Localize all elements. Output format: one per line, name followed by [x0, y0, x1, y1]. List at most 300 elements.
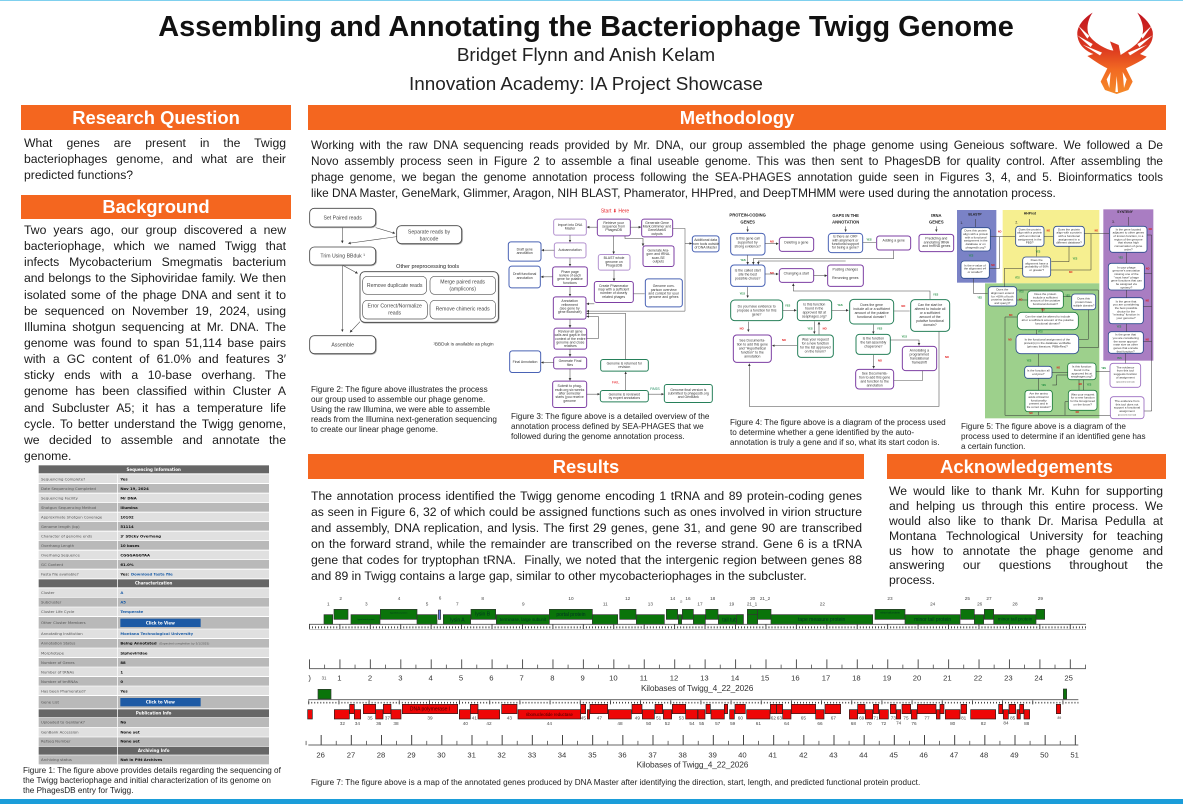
flowchart: figure 5 function decisions: YES — [1117, 327, 1122, 329]
flowchart: figure 5 function decisions: proteins (subject — [991, 298, 1014, 302]
flowchart: figure 5 function decisions: NO — [1019, 300, 1023, 302]
flowchart: figure 4 gene decisions: and "Hypothetical — [739, 346, 766, 350]
flowchart: figure 3 annotation overview: Retrieve your — [603, 221, 625, 225]
gene numbers: reverse track: 60 — [738, 715, 743, 720]
flowchart: figure 3 annotation overview: map with a sufficient — [598, 288, 629, 292]
scale: kilobases 26 to 51: 50 — [1040, 750, 1049, 759]
table: figure 1 phage data: Gene List — [41, 700, 60, 705]
gene track: reverse genes 32 to 89: DNA polymerase I — [410, 707, 450, 713]
flowchart: figure 3 annotation overview: genome — [563, 399, 576, 403]
flowchart: figure 5 function decisions: for >60% of both — [991, 294, 1014, 298]
text: background: with a GC content of 61.0% and features 3′ — [24, 352, 286, 366]
table: figure 1 phage data: GenBank Accession — [41, 729, 79, 734]
scale: kilobases 26 to 51: 41 — [768, 750, 777, 759]
table: figure 1 phage data: Shotgun Sequencing Method — [41, 505, 97, 510]
flowchart: figure 5 function decisions: Can the start be altered to include — [1025, 315, 1071, 319]
flowchart: figure 5 function decisions: YES — [1015, 277, 1020, 279]
flowchart: figure 4 gene decisions: translational — [910, 357, 929, 361]
flowchart: figure 3 annotation overview: Master — [565, 226, 576, 230]
flowchart: figure 4 gene decisions: Does the gene — [860, 303, 883, 307]
flowchart: figure 4 gene decisions: propose a function for this — [737, 308, 777, 312]
flowchart: figure 5 function decisions: Was your request — [1071, 392, 1095, 396]
flowchart: figure 4 gene decisions: approved list at — [803, 310, 826, 314]
gene track: forward genes 1 to 29 — [324, 609, 1045, 624]
scale: kilobases 0 to 25: 23 — [1004, 673, 1013, 682]
scale: kilobases 0 to 25: 11 — [640, 673, 648, 682]
table: figure 1 phage data: Not in Pitt Archives — [120, 757, 163, 762]
gene numbers: track one: 25 — [965, 596, 970, 601]
gene numbers: track one: 1 — [327, 601, 330, 606]
caption: figure 1: the Twigg bacteriophage and initial characterization of its genome on — [23, 776, 271, 785]
flowchart: figure 3 annotation overview: outputs — [651, 232, 663, 236]
scale: kilobases 26 to 51: 32 — [497, 750, 506, 759]
heading: research question: Research Question — [72, 107, 240, 128]
gene numbers: reverse track: 37 — [385, 715, 390, 720]
flowchart: figure 5 function decisions: Is the gene that — [1115, 333, 1136, 337]
flowchart: figure 5 function decisions: NO — [1008, 339, 1012, 341]
flowchart: figure 3 annotation overview: gorn and tRNA- — [646, 252, 670, 256]
flowchart: figure 4 gene decisions: annotation — [867, 383, 883, 387]
flowchart: figure 4 gene decisions: functional domain? — [857, 315, 886, 319]
flowchart: figure 5 function decisions: database or on — [966, 242, 986, 246]
flowchart: figure 4 gene decisions: the tail assembly — [860, 341, 886, 345]
flowchart: figure 3 annotation overview: Generate Gene — [645, 221, 669, 225]
table: figure 1 phage data: Other Cluster Members — [41, 620, 86, 625]
gene numbers: track one: 8 — [481, 596, 484, 601]
flowchart: figure 5 function decisions: Does the — [996, 288, 1009, 292]
flowchart: figure 5 function decisions: functional domain? — [1035, 321, 1061, 325]
gene numbers: reverse track: 85 — [1010, 715, 1016, 720]
flowchart: figure 4 gene decisions: Deleting a gene — [784, 241, 809, 245]
scale: kilobases 26 to 51: 34 — [558, 750, 567, 759]
flowchart: figure 4 gene decisions: Is this gene call — [736, 237, 760, 241]
flowchart: figure 4 gene decisions: PROTEIN-CODING — [729, 213, 766, 218]
caption: figure 5: process used to determine if an identified gene has — [961, 432, 1146, 441]
text: acknowledgements: Montana Technological University for teaching — [889, 529, 1163, 543]
gene numbers: reverse track: 57 — [715, 721, 721, 726]
scale: kilobases 26 to 51: 26 — [316, 750, 325, 759]
gene numbers: reverse track: 62 — [771, 715, 776, 720]
table: figure 1 phage data — [38, 465, 269, 764]
flowchart: figure 3 annotation overview: gene flowchart) — [558, 310, 581, 314]
flowchart: figure 5 function decisions: acids critical for — [1028, 395, 1049, 399]
caption: figure 2: Using the raw Illumina, we were able to assemble — [311, 405, 490, 414]
flowchart: figure 4 gene decisions: Rerunning genes — [832, 276, 859, 280]
gene numbers: track one: 28 — [1012, 601, 1018, 606]
scale: kilobases 26 to 51: 42 — [799, 750, 808, 759]
scale: kilobases 0 to 25: 18 — [852, 673, 861, 682]
text: results: The annotation process identified the Twigg genome encoding 1 tRNA and 89 protein-coding genes — [311, 488, 862, 502]
scale: kilobases 26 to 51: 31 — [467, 750, 476, 759]
flowchart: figure 4 gene decisions: tion to add this gene — [737, 342, 768, 346]
flowchart: figure 4 gene decisions: Is this function — [803, 302, 825, 306]
flowchart: figure 3 annotation overview: Pham page — [561, 270, 579, 274]
flowchart: figure 3 annotation overview: genome and genes — [649, 295, 679, 299]
panel: evidence evaluation — [985, 283, 1099, 418]
table: figure 1 phage data: Yes — [119, 476, 128, 481]
gene numbers: track one: 16 — [685, 596, 691, 601]
gene numbers: track one: 19 — [729, 601, 735, 606]
table: figure 1 phage data: Mr DNA — [120, 495, 137, 500]
scale: kilobases 0 to 25: 21 — [943, 673, 952, 682]
gene numbers: track one: 10 — [568, 596, 574, 601]
flowchart: figure 3 annotation overview: functions — [563, 281, 577, 285]
flowchart: figure 4 gene decisions: with alignment or — [832, 238, 859, 242]
text: acknowledgements: answering our questions throughout the — [889, 558, 1163, 572]
flowchart: figure 2 assembly: Remove chimeric reads — [436, 306, 490, 312]
scale: kilobases 26 to 51: 39 — [708, 750, 717, 759]
flowchart: figure 4 gene decisions: include all or a sufficient — [853, 307, 890, 311]
table: figure 1 phage data: Being Annotated — [120, 641, 157, 646]
flowchart: figure 4 gene decisions: ANNOTATION — [832, 220, 859, 225]
caption: figure 5: Figure 5: The figure above is a diagram of the — [961, 422, 1126, 431]
flowchart: figure 5 function decisions: the alignment e4 — [964, 267, 986, 271]
heading: results — [308, 454, 864, 479]
flowchart: figure 4 gene decisions: See Documenta- — [739, 338, 765, 342]
flowchart: figure 5 function decisions: align with a protein — [963, 232, 989, 236]
flowchart: figure 4 gene decisions: YES — [933, 293, 939, 297]
flowchart: figure 5 function decisions: mate size as other — [1113, 343, 1138, 347]
text: results — [311, 488, 862, 583]
gene numbers: track one: 14 — [670, 596, 676, 601]
gene numbers: reverse track: 66 — [817, 721, 823, 726]
gene numbers: reverse track: 55 — [699, 721, 705, 726]
text: results: gene that codes for tryptophan tRNA. Finally, we noted that the intergenic region between genes 88 — [311, 553, 862, 567]
caption: figure 1: the PhagesDB entry for Twigg. — [23, 786, 133, 795]
flowchart: figure 3 annotation overview: Genome final version is — [670, 388, 707, 392]
scale: kilobases 0 to 25 — [308, 664, 1086, 693]
flowchart: figure 5 function decisions: this tool does not — [1116, 402, 1139, 406]
table: figure 1 phage data: Sequencing Complete? — [41, 476, 85, 481]
flowchart: figure 5 function decisions: "must have" phage — [1114, 275, 1139, 279]
flowchart: figure 5 function decisions: the best possible — [1115, 306, 1138, 310]
flowchart: figure 5 function decisions: with a functional — [965, 235, 987, 239]
gene numbers: track one: 29 — [1038, 596, 1043, 601]
flowchart: figure 4 gene decisions: site the best — [738, 272, 757, 276]
caption: figure 1 — [23, 766, 281, 795]
flowchart: figure 4 gene decisions — [729, 213, 954, 407]
scale: kilobases 0 to 25: 9 — [581, 673, 585, 682]
chart: figure 7 genome map — [307, 595, 1086, 726]
flowchart: figure 3 annotation overview: revision — [618, 365, 630, 369]
gene numbers: track one — [327, 595, 1043, 606]
flowchart: figure 5 function decisions: NO — [998, 232, 1002, 234]
heading: acknowledgements — [887, 454, 1166, 479]
gene numbers: track one: 23 — [887, 596, 893, 601]
flowchart: figure 5 function decisions: assignment in the — [1018, 237, 1042, 241]
gene numbers: reverse track: 47 — [597, 715, 602, 720]
flowchart: figure 2 assembly: Other preprocessing tools — [396, 264, 459, 270]
gene numbers: reverse track: 70 — [866, 721, 872, 726]
scale: kilobases 0 to 25: 3 — [398, 673, 402, 682]
text: results: and 89 in Twigg contains a large gap, similar to other mycobacteriophages in the subcluster. — [311, 569, 807, 583]
scale: kilobases 26 to 51: 49 — [1010, 750, 1019, 759]
heading: background — [21, 195, 291, 219]
text: results: as seen in Figure 6, 32 of which could be assigned functions such as ones involved in virion structure — [311, 505, 862, 519]
flowchart: figure 4 gene decisions: Adding a gene — [883, 239, 905, 243]
flowchart: figure 3 annotation overview: from tools outside — [692, 242, 719, 246]
flowchart: figure 5 function decisions: the same approxi- — [1114, 339, 1138, 343]
flowchart: figure 5 function decisions: (proceed to next tool) — [1116, 380, 1135, 383]
flowchart: figure 4 gene decisions: and function to the — [860, 379, 889, 383]
flowchart: figure 5 function decisions: for a new function — [1071, 396, 1095, 400]
text: background: be sequenced on November 19, 2024, using — [24, 304, 286, 318]
flowchart: figure 2 assembly: Set Paired reads — [323, 215, 362, 221]
gene numbers: reverse track: 88 — [1024, 721, 1030, 726]
text: background: bacteriophage, which we named Twigg that — [24, 239, 286, 253]
scale: kilobases 26 to 51: 29 — [407, 750, 416, 759]
scale: kilobases 0 to 25: 25 — [1064, 673, 1073, 682]
flowchart: figure 4 gene decisions: NO — [945, 355, 949, 359]
flowchart: figure 2 assembly: Separate reads by — [408, 230, 450, 236]
flowchart: figure 5 function decisions: that function? — [1117, 349, 1135, 353]
table: figure 1 phage data: Sequencing Information — [127, 467, 181, 472]
text: research question: bacteriophages genome, and what are their — [24, 152, 286, 166]
panel: BLASTP — [957, 210, 996, 283]
scale: kilobases 26 to 51: 43 — [829, 750, 838, 759]
flowchart: figure 3 annotation overview: Draft functional — [513, 272, 537, 276]
flowchart: figure 4 gene decisions: or a sufficient — [920, 311, 940, 315]
table: figure 1 phage data: Overhang Sequence — [41, 552, 81, 557]
gene numbers: reverse track: 45 — [581, 715, 586, 720]
table: figure 1 phage data: 61.0% — [120, 562, 134, 567]
gene numbers: track one: 17 — [697, 601, 703, 606]
flowchart: figure 4 gene decisions: YES — [740, 291, 745, 295]
flowchart: figure 5 function decisions: 1. — [960, 221, 963, 225]
flowchart: figure 5 function decisions — [957, 209, 1154, 420]
flowchart: figure 5 function decisions: on the forum? — [1073, 402, 1092, 406]
gene numbers: reverse track — [340, 715, 1061, 726]
flowchart: figure 3 annotation overview: parison overview — [651, 288, 677, 292]
text: background: and Subcluster A5; it has a temperature life — [24, 401, 286, 415]
flowchart: figure 4 gene decisions: NO — [901, 304, 905, 308]
flowchart: figure 5 function decisions: all or a sufficient amount of the putative — [1022, 318, 1074, 322]
flowchart: figure 5 function decisions: 2. — [1015, 221, 1018, 225]
flowchart: figure 3 annotation overview: esdb.org six weeks — [555, 388, 585, 392]
flowchart: figure 5 function decisions: NO — [1146, 301, 1149, 303]
flowchart: figure 5 function decisions: the correct location? — [1027, 405, 1051, 409]
flowchart: figure 4 gene decisions: Annotating a — [910, 349, 929, 353]
gene numbers: track one: 2 — [339, 596, 342, 601]
heading: background: Background — [102, 196, 210, 217]
text: methodology: Working with the raw DNA sequencing reads provided by Mr. DNA, our group assembled the phage genome using Geneious software. We followed a De — [311, 138, 1163, 152]
gene numbers: track one: 9 — [522, 601, 525, 606]
gene numbers: reverse track: 89 — [1057, 716, 1061, 720]
flowchart: figure 5 function decisions: The evidence from — [1115, 399, 1140, 403]
flowchart: figure 5 function decisions: from this tool — [1117, 369, 1134, 373]
caption: figure 7: Figure 7: The figure above is a map of the annotated genes produced by DNA Master after identifying the direction, start, length, and predicted functional protein product. — [311, 778, 920, 787]
flowchart: figure 5 function decisions: functionality — [1031, 398, 1047, 402]
text: background: genome has been classified within Cluster A — [24, 384, 286, 398]
caption: figure 3: Figure 3: The figure above is a detailed overview of the — [511, 412, 709, 421]
scale: kilobases 26 to 51: 40 — [738, 750, 747, 759]
flowchart: figure 5 function decisions: NO — [1057, 367, 1060, 369]
flowchart: figure 5 function decisions: YES — [1038, 331, 1043, 333]
text: acknowledgements: us how to annotate the phage genome and — [889, 544, 1163, 558]
gene track: forward genes 1 to 29: minor tail protein — [998, 616, 1033, 621]
table: figure 1 phage data: Cluster Life Cycle — [41, 609, 75, 614]
gene numbers: reverse track: 43 — [507, 715, 512, 720]
flowchart: figure 5 function decisions: genes that encode — [1113, 346, 1138, 350]
gene numbers: reverse track: 74 — [896, 720, 902, 725]
gene track: forward genes 1 to 29: tail tube — [722, 617, 740, 623]
gene numbers: reverse track: 76 — [911, 721, 917, 726]
flowchart: figure 5 function decisions: your genome? — [1116, 316, 1136, 320]
table: figure 1 phage data: Click to View — [146, 700, 175, 705]
flowchart: figure 3 annotation overview: Genome is reviewed — [609, 392, 640, 396]
flowchart: figure 4 gene decisions: Can the start be — [918, 303, 942, 307]
gene track: forward genes 1 to 29: tape measure protein — [798, 617, 846, 623]
flowchart: figure 4 gene decisions: GAPS IN THE — [832, 213, 859, 218]
gene numbers: reverse track: 48 — [617, 721, 623, 726]
icon: phoenix logo — [1077, 12, 1153, 94]
flowchart: figure 4 gene decisions: programmed — [910, 353, 929, 357]
table: figure 1 phage data: None yet — [120, 729, 140, 734]
flowchart: figure 3 annotation overview: Generate Ara- — [647, 248, 669, 252]
flowchart: figure 5 function decisions: Does the protein — [1019, 227, 1041, 231]
flowchart: figure 3 annotation overview — [508, 208, 720, 408]
scale: kilobases 26 to 51: 30 — [437, 750, 446, 759]
text: results: on the forward strand, while the remainder are transcribed on the reverse strand. Gene 6 is a tRNA — [311, 537, 862, 551]
scale: kilobases 0 to 25: 5 — [459, 673, 463, 682]
caption: figure 4 — [730, 418, 946, 447]
table: figure 1 phage data: GC Content — [41, 562, 64, 567]
caption: figure 5 — [961, 422, 1146, 451]
scale: kilobases 0 to 25: 20 — [913, 673, 921, 682]
scale: kilobases 26 to 51: 48 — [980, 750, 988, 759]
flowchart: figure 3 annotation overview: genome on — [605, 260, 623, 264]
scale: kilobases 0 to 25: 1 — [337, 673, 341, 682]
flowchart: figure 4 gene decisions: functional support — [832, 242, 859, 246]
flowchart: figure 5 function decisions: of assignment — [1116, 375, 1135, 379]
gene track: forward genes 1 to 29: lysin A — [450, 617, 465, 623]
flowchart: figure 2 assembly: Assemble — [331, 342, 354, 348]
gene numbers: reverse track: 49 — [635, 715, 640, 720]
flowchart: figure 3 annotation overview: context of the entire — [555, 337, 586, 341]
flowchart: figure 5 function decisions: protein have — [1075, 300, 1092, 304]
text: results: and assembly, DNA replication, and lysis. The first 29 genes, gene 31, and gene 90 are transcribed — [311, 521, 862, 535]
caption: figure 2: Figure 2: The figure above illustrates the process — [311, 385, 488, 394]
flowchart: figure 4 gene decisions: Do you have evidence to — [738, 304, 776, 308]
table: figure 1 phage data: Montana Technological University — [120, 631, 194, 636]
heading: methodology: Methodology — [680, 107, 794, 128]
flowchart: figure 4 gene decisions: and tmRNA genes — [922, 244, 951, 248]
flowchart: figure 5 function decisions: 3. — [1112, 220, 1115, 224]
flowchart: figure 3 annotation overview: starts (you receive — [556, 395, 584, 399]
flowchart: figure 4 gene decisions: YES — [837, 303, 843, 307]
flowchart: figure 5 function decisions: alignment extend — [991, 291, 1014, 295]
flowchart: figure 5 function decisions: YES — [1041, 385, 1046, 387]
scale: kilobases 26 to 51: 28 — [377, 750, 385, 759]
table: figure 1 phage data: Morphotype — [41, 650, 65, 655]
flowchart: figure 3 annotation overview: genome and close — [556, 341, 585, 345]
table: figure 1 phage data: Character of genome ends — [41, 533, 92, 538]
table: figure 1 phage data: Archiving status — [41, 757, 72, 762]
table: figure 1 phage data: Cluster — [41, 590, 55, 595]
flowchart: figure 4 gene decisions: supported by — [738, 241, 758, 245]
flowchart: figure 5 function decisions: genome's annotation — [1112, 269, 1141, 273]
flowchart: figure 5 function decisions: Does the — [1031, 258, 1043, 262]
scale: kilobases 26 to 51: 35 — [588, 750, 597, 759]
caption: figure 3: annotation process defined by SEA-PHAGES that we — [511, 422, 704, 431]
flowchart: figure 5 function decisions: Is the gene located — [1116, 227, 1141, 231]
table: figure 1 phage data: 10 bases — [120, 543, 140, 548]
text: research question — [24, 136, 286, 182]
flowchart: figure 4 gene decisions: annotation — [744, 354, 760, 358]
text: acknowledgements — [889, 484, 1163, 587]
gene numbers: track one: 7 — [456, 601, 459, 606]
flowchart: figure 4 gene decisions: NO — [878, 358, 882, 362]
flowchart: figure 4 gene decisions: tion to add this gene — [859, 375, 890, 379]
gene numbers: reverse track: 75 — [903, 715, 909, 720]
flowchart: figure 3 annotation overview: annotation — [517, 276, 533, 280]
flowchart: figure 4 gene decisions: frameshift — [912, 361, 927, 365]
flowchart: figure 4 gene decisions: for being a gene? — [832, 246, 859, 250]
table: figure 1 phage data: Refseq Number — [41, 739, 71, 744]
flowchart: figure 3 annotation overview: number of closely — [600, 291, 627, 295]
flowchart: figure 4 gene decisions: YES — [877, 327, 883, 331]
flowchart: figure 4 gene decisions: See Documenta- — [862, 371, 888, 375]
caption: figure 3 — [511, 412, 709, 441]
scale: kilobases 26 to 51: 51 — [1070, 750, 1079, 759]
scale: kilobases 26 to 51: 37 — [648, 750, 657, 759]
flowchart: figure 5 function decisions: Is the gene that — [1116, 299, 1137, 303]
flowchart: figure 4 gene decisions: Posting changes — [833, 267, 858, 271]
flowchart: figure 3 annotation overview: Additional data — [694, 238, 717, 242]
table: figure 1 phage data: 1 — [120, 669, 123, 674]
scale: kilobases 26 to 51: 38 — [678, 750, 687, 759]
text: acknowledgements: We would like to thank Mr. Kuhn for supporting — [889, 484, 1163, 498]
flowchart: figure 4 gene decisions: amount of the — [919, 315, 941, 319]
scale: kilobases 26 to 51: 45 — [889, 750, 898, 759]
text: methodology: like DNA Master, GeneMark, Glimmer, Aragon, NIH BLAST, Phamerator, HHPred, and DeepTMHMM were used during the annotation process. — [311, 186, 1056, 200]
flowchart: figure 5 function decisions: NO — [1041, 310, 1045, 312]
flowchart: figure 4 gene decisions: NO — [770, 271, 774, 275]
scale: kilobases 0 to 25: 2 — [368, 673, 372, 682]
table: figure 1 phage data: Siphoviridae — [120, 650, 148, 655]
flowchart: figure 2 assembly: Trim Using BBduk ¹ — [320, 253, 365, 259]
gene numbers: reverse track: 84 — [1003, 720, 1009, 725]
gene numbers: reverse track: 67 — [831, 715, 836, 720]
panel: HHPred — [1003, 210, 1099, 283]
flowchart: figure 2 assembly: Remove duplicate reads — [367, 283, 423, 289]
flowchart: figure 3 annotation overview: Final Annotation — [513, 360, 537, 364]
flowchart: figure 5 function decisions: with a functional — [1058, 234, 1080, 238]
table: figure 1 phage data: Uploaded to GenBank? — [41, 720, 85, 725]
flowchart: figure 5 function decisions: NO — [1029, 413, 1033, 415]
scale: kilobases 0 to 25: 15 — [761, 673, 769, 682]
scale: kilobases 26 to 51: 33 — [528, 750, 536, 759]
flowchart: figure 4 gene decisions: Is the called start — [735, 268, 761, 272]
text: background: isolated some of the phage DNA and sent it to — [24, 288, 286, 302]
caption: figure 2: our group used to assemble our phage genome. — [311, 395, 485, 404]
scale: kilobases 0 to 25: 13 — [700, 673, 709, 682]
flowchart: figure 3 annotation overview: Draft gene — [517, 248, 533, 252]
gene track: forward genes 1 to 29: minor tail protein — [880, 611, 900, 615]
flowchart: figure 5 function decisions: YES — [977, 298, 982, 300]
table: figure 1 phage data: Illumina — [120, 505, 138, 510]
flowchart: figure 3 annotation overview: outputs — [653, 260, 664, 264]
table: figure 1 phage data: CGGGAGGTAA — [120, 552, 150, 557]
gene numbers: reverse track: 53 — [679, 715, 684, 720]
scale: kilobases 0 to 25: 8 — [550, 673, 554, 682]
flowchart: figure 3 annotation overview: Start ⬇ Here — [601, 208, 629, 215]
gene numbers: reverse track: 71 — [873, 715, 879, 720]
flowchart: figure 3 annotation overview: related phages — [602, 295, 625, 299]
flowchart: figure 3 annotation overview: by expert annotators — [609, 396, 640, 400]
flowchart: figure 4 gene decisions: YES — [866, 238, 872, 242]
flowchart: figure 3 annotation overview: Generate Final — [559, 359, 582, 363]
